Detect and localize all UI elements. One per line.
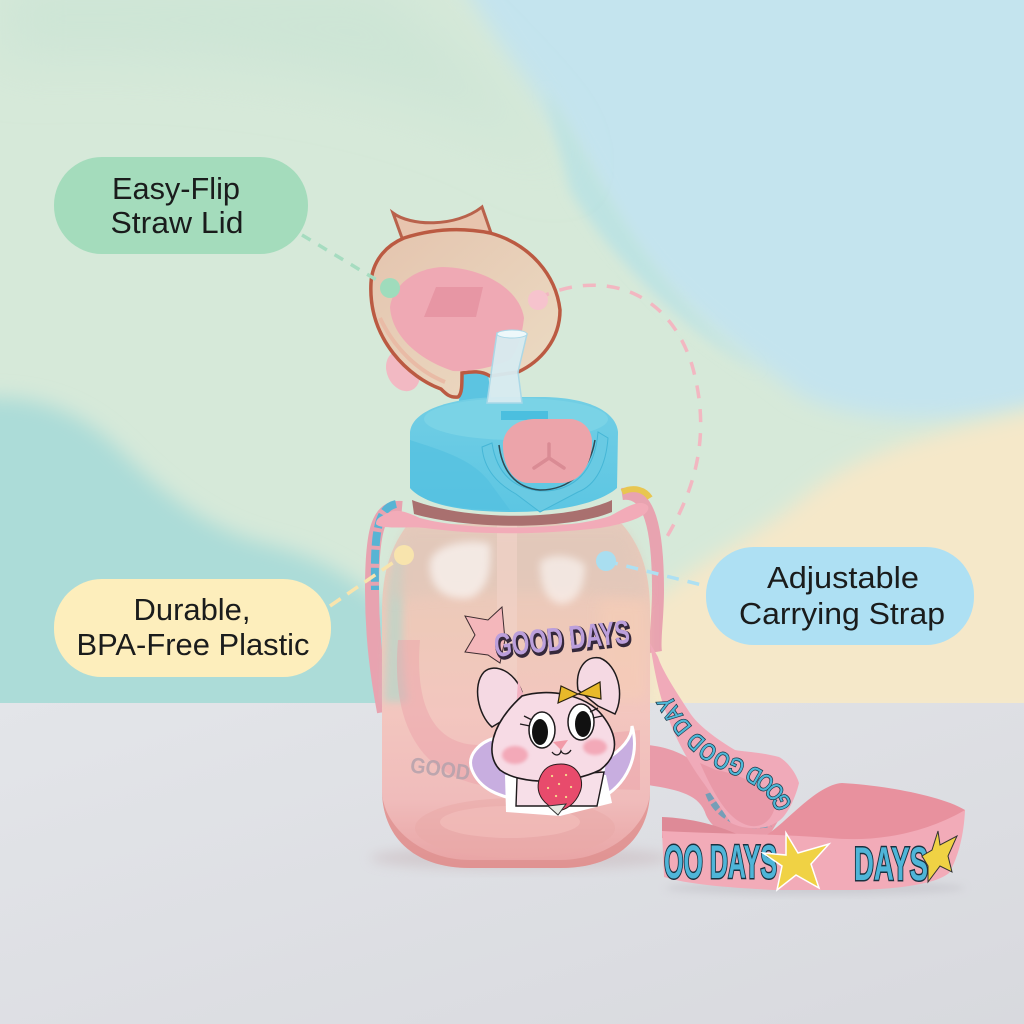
bunny eyes: [529, 712, 555, 748]
lid top notch: [393, 207, 491, 243]
lid notch ring: [405, 233, 486, 245]
illustration: water bottle: [365, 204, 965, 892]
yellow star: [763, 833, 829, 890]
bottle base: [415, 798, 615, 858]
internal straw: [497, 525, 517, 705]
bunny left wing: [471, 738, 525, 800]
bunny head: [492, 693, 614, 781]
connector: strap arc: [528, 285, 701, 540]
loose strap: descending ribbon: [650, 645, 965, 892]
sticker: star and GOOD DAYS: GOOD DAYS: [492, 613, 631, 664]
background: pastel watercolor wall: [0, 0, 1024, 720]
straw base tab: [501, 411, 548, 420]
bunny right ear: [577, 658, 620, 714]
callout: Adjustable Carrying Strap: Carrying Strap: [739, 596, 945, 631]
front band: [662, 810, 965, 890]
strap pattern, left side: [375, 504, 396, 590]
callout: Adjustable Carrying Strap: [706, 547, 974, 645]
button Y mark: [534, 444, 564, 468]
sticker: star and GOOD DAYS: GOOD DAYS: [493, 615, 633, 666]
callout: Durable, BPA-Free Plastic: [54, 579, 331, 677]
loose strap: descending ribbon: DAYS: [854, 837, 928, 890]
strawberry leaf: [548, 804, 566, 815]
bottle shadow: [370, 846, 670, 870]
strap behind bottle, right side: [622, 494, 658, 652]
rear band running from bottle into loop: [648, 745, 780, 837]
cap side: [410, 397, 618, 512]
sticker: star and GOOD DAYS: [465, 607, 633, 666]
lid finger tab: [380, 345, 426, 397]
sticker base: [505, 775, 612, 816]
tabletop surface: [0, 703, 1024, 1024]
callout: Durable, BPA-Free Plastic: Durable,: [134, 592, 250, 627]
callout: Durable, BPA-Free Plastic: BPA-Free Plastic: [76, 627, 310, 662]
button recess: [499, 440, 595, 490]
bottle body: [382, 524, 650, 868]
cap top: [424, 398, 608, 440]
strap shadow: [665, 881, 965, 895]
lid lower rim shine: [380, 318, 445, 382]
letters of strap seen through plastic: GOOD: [409, 752, 472, 785]
inner band left: [662, 817, 745, 838]
callout: Easy-Flip Straw Lid: Easy-Flip: [112, 171, 240, 206]
bunny left ear: [478, 668, 522, 727]
cap hinge: [458, 372, 492, 410]
yellow star small: [922, 831, 957, 882]
callout: Easy-Flip Straw Lid: Straw Lid: [110, 205, 244, 240]
sticker: bunny with strawberry: [471, 658, 634, 816]
bunny blush: [502, 746, 528, 764]
cap side shading: [410, 440, 510, 510]
straw: [487, 333, 527, 403]
button: [503, 419, 592, 483]
lid seal plug: [424, 287, 483, 317]
cap: [410, 372, 618, 512]
bunny lashes: [520, 708, 602, 726]
open lid: [371, 207, 560, 403]
band text: OO DAYS: [664, 835, 777, 888]
blue pattern on rear band: [712, 792, 770, 821]
bunny nose and mouth: [553, 740, 568, 750]
teal tint seen through left of bottle: [384, 540, 408, 702]
thread under cap: [412, 500, 612, 526]
strap behind bottle, left side: [372, 508, 402, 712]
callout: Easy-Flip Straw Lid: [54, 157, 308, 254]
bunny body: [516, 772, 604, 806]
lid shell: [371, 230, 560, 397]
neck ring: [376, 503, 648, 533]
callout: Adjustable Carrying Strap: Adjustable: [767, 560, 919, 595]
bunny right wing: [598, 726, 634, 800]
strawberry seeds: [548, 775, 571, 797]
strawberry: [538, 764, 582, 811]
connector: lid callout: [302, 235, 400, 298]
lid inner seal: [390, 267, 524, 371]
glass highlights: [430, 542, 490, 598]
connector: carrying strap callout: [596, 551, 706, 586]
button surround: [482, 432, 608, 512]
connector: plastic callout: [330, 545, 414, 606]
ribbon lettering: GOOD GOOD DAY: [655, 698, 791, 810]
bunny bow: [558, 682, 601, 703]
loose strap: descending ribbon: DAYS: [854, 837, 928, 890]
rear band: [762, 783, 965, 850]
ribbon inner fold: [700, 763, 775, 826]
right peach tint: [600, 600, 646, 700]
loose strap: descending ribbon: OO DAYS: [664, 835, 777, 888]
bunny left ear inner: [516, 680, 526, 712]
upper bottle grey tint: [392, 530, 646, 600]
inner strap through the bottle: [397, 640, 640, 790]
